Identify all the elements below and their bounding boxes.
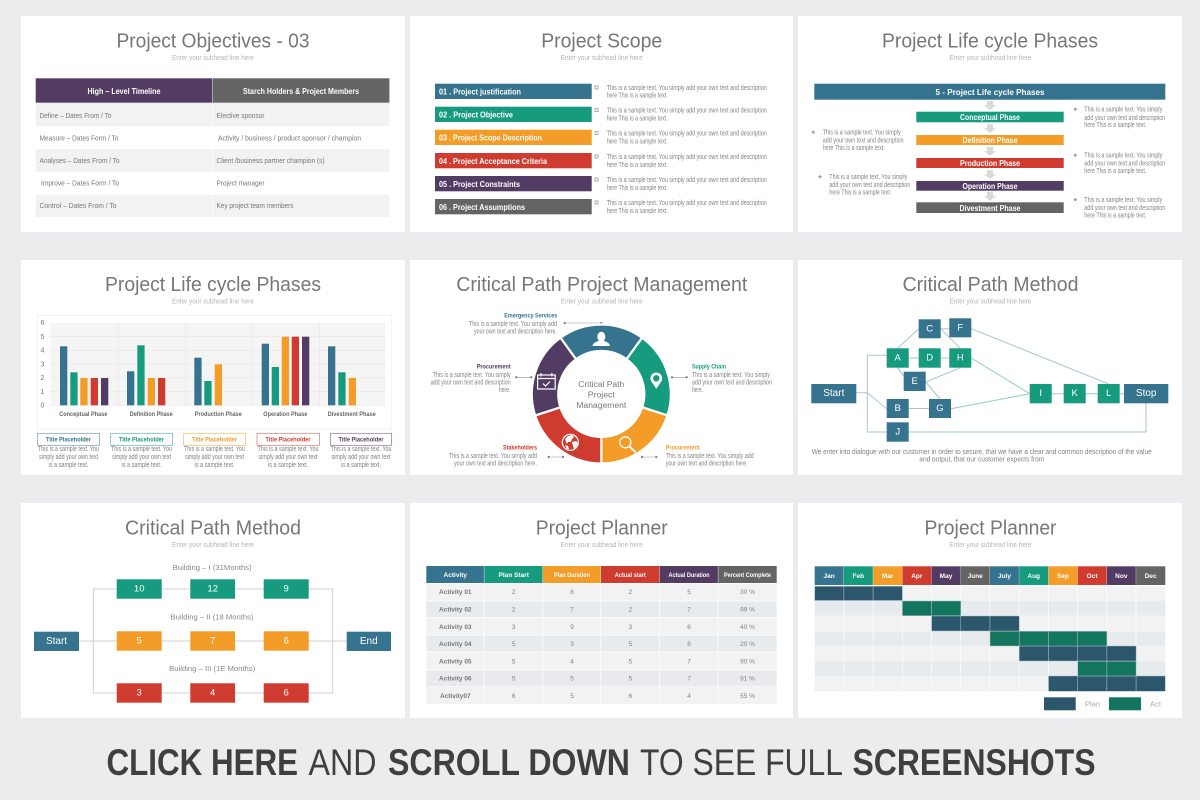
planner table: 5 <box>570 693 574 700</box>
scope item 04: 04 . Project Acceptance Criteria <box>439 157 547 166</box>
scope item 02: 02 . Project Objective <box>439 111 513 120</box>
description text: We enter into dialogue with our customer in order to secure, that we have a clear and common description of the value <box>812 447 1152 456</box>
planner table: 4 <box>687 693 691 700</box>
network nodes <box>811 318 1168 442</box>
gantt legend: Plan <box>1085 699 1100 708</box>
callout: procurement left <box>431 364 511 394</box>
gantt month header: Dec <box>1145 573 1157 580</box>
building II row: 7 <box>210 636 215 646</box>
phase stack: Operation Phase <box>962 182 1018 191</box>
gantt month header: Oct <box>1087 573 1098 580</box>
placeholder card 2: simply add your own text <box>112 454 171 461</box>
panel: life cycle bar chart <box>21 260 405 475</box>
building labels: Building – I (31Months) <box>173 563 252 572</box>
planner table: Activity 05 <box>439 658 472 665</box>
placeholder card 5: simply add your own text <box>332 454 391 461</box>
panel: project scope <box>410 16 793 232</box>
callout: procurement right <box>666 444 754 468</box>
note right 1: add your own text and description <box>1084 115 1165 122</box>
note right 2: ❖ <box>1073 153 1078 159</box>
gantt month header <box>815 566 1165 585</box>
building I row: 9 <box>284 584 289 594</box>
note right 2: add your own text and description <box>1084 161 1165 168</box>
gantt month header: May <box>940 573 953 580</box>
network nodes: F <box>957 322 963 333</box>
subhead: Enter your subhead line here <box>172 542 254 549</box>
planner table: Actual start <box>615 572 647 579</box>
callout: supply chain: here. <box>692 387 703 394</box>
planner table: 6 <box>512 693 516 700</box>
table: Define – Dates From / To <box>40 111 112 120</box>
building III row: 4 <box>210 688 215 698</box>
bar chart: 3 <box>41 361 45 368</box>
subhead: Enter your subhead line here <box>950 542 1032 549</box>
planner table: 4 <box>570 658 574 665</box>
planner table: 2 <box>628 606 632 613</box>
note left 1: here This is a sample text. <box>823 145 885 152</box>
bar chart: Conceptual Phase <box>59 411 108 418</box>
planner table: 7 <box>687 606 691 613</box>
bar chart: 4 <box>41 348 45 355</box>
footer call to action: SCREENSHOTS <box>852 742 1096 783</box>
start node <box>34 632 79 651</box>
planner table: 7 <box>687 675 691 682</box>
network nodes: K <box>1072 388 1079 399</box>
scope item 03: This is a sample text. You simply add your own text and description <box>607 131 767 138</box>
phase stack: Conceptual Phase <box>960 113 1020 122</box>
table: Measure – Dates Form / To <box>40 134 118 143</box>
panel: project planner gantt <box>798 503 1182 718</box>
path connectors <box>79 589 347 693</box>
heading: critical path method: Critical Path Method <box>125 516 301 539</box>
heading: project planner: Project Planner <box>924 516 1057 539</box>
planner table: Plan Start <box>499 572 530 579</box>
note right 1: This is a sample text. You simply <box>1084 107 1163 114</box>
building I row: 12 <box>207 584 218 594</box>
building III row: 3 <box>137 688 142 698</box>
start node: Start <box>46 636 67 647</box>
footer call to action: TO SEE FULL <box>640 742 843 783</box>
placeholder card 3: Title Placeholder <box>192 436 237 443</box>
placeholder card 3: simply add your own text <box>185 454 244 461</box>
building II row <box>117 631 309 651</box>
scope item 02: here This is a sample text. <box>607 116 668 123</box>
table: Activity / business / product sponsor / champion <box>218 134 361 143</box>
building labels: Building – III (1E Months) <box>169 664 256 673</box>
heading: critical path project management: Critical Path Project Management <box>456 273 748 296</box>
subhead: Enter your subhead line here <box>561 55 643 62</box>
note left 1: add your own text and description <box>823 138 904 145</box>
note right 1 <box>1073 106 1165 129</box>
planner table: 20 % <box>740 641 755 648</box>
note left 1 <box>811 130 904 152</box>
callout: supply chain: Supply Chain <box>692 363 726 370</box>
building I row: 10 <box>134 584 144 594</box>
network nodes: J <box>895 426 900 438</box>
placeholder card 1: is a sample text. <box>48 462 89 469</box>
subhead: Enter your subhead line here <box>172 298 254 305</box>
building labels: Building – II (18 Months) <box>170 612 254 621</box>
callout: procurement left: This is a sample text. You simply <box>433 372 511 379</box>
bar chart: 6 <box>41 320 45 327</box>
callout: procurement right: your own text and description here. <box>666 460 748 467</box>
table: Control – Dates From / To <box>40 201 116 210</box>
table: Analyses – Dates From / To <box>40 156 120 165</box>
note right 3 <box>1073 197 1165 220</box>
description text <box>812 447 1152 464</box>
ring centre label: Management <box>576 401 627 410</box>
icon: calendar <box>538 373 555 389</box>
planner table: 91 % <box>740 675 755 682</box>
heading: project planner: Project Planner <box>536 516 668 539</box>
callout: procurement right: Procurement <box>666 444 700 451</box>
heading: project objectives: Project Objectives - 03 <box>116 30 310 53</box>
note right 1: ❖ <box>1073 107 1078 113</box>
planner table: Activity <box>444 572 467 579</box>
scope item 01 <box>435 84 767 100</box>
placeholder card 2: This is a sample text. You <box>111 446 172 453</box>
network nodes: E <box>912 376 918 387</box>
callout: stakeholders: This is a sample text. You simply add <box>449 453 537 460</box>
note right 2: This is a sample text. You simply <box>1084 153 1163 160</box>
arrows between phases <box>984 101 996 201</box>
scope item 06: here This is a sample text. <box>607 208 668 215</box>
note left 2: add your own text and description <box>829 182 910 189</box>
gantt legend <box>1044 697 1162 710</box>
planner table: 30 % <box>740 589 755 596</box>
network connectors <box>856 329 1146 432</box>
planner table: 5 <box>512 675 516 682</box>
label connectors <box>515 322 688 458</box>
planner table: 99 % <box>740 606 755 613</box>
building I row <box>117 579 309 599</box>
note right 2 <box>1073 152 1165 175</box>
gantt month header: Aug <box>1027 573 1040 580</box>
scope item 01: 01 . Project justification <box>439 88 521 97</box>
footer call to action <box>106 742 1096 783</box>
scope item 01: here This is a sample text. <box>607 93 668 100</box>
planner table: Activity 04 <box>439 641 472 648</box>
table: Key project team members <box>216 201 294 210</box>
planner table: 2 <box>512 589 516 596</box>
footer call to action: CLICK HERE <box>106 742 298 783</box>
placeholder card 3: This is a sample text. You <box>184 446 245 453</box>
subhead: Enter your subhead line here <box>172 55 254 62</box>
scope item 04: This is a sample text. You simply add your own text and description <box>607 154 767 161</box>
placeholder card 5 <box>330 433 392 469</box>
placeholder card 2: is a sample text. <box>122 462 162 469</box>
gantt month header: June <box>968 573 983 580</box>
planner table: 3 <box>512 624 516 631</box>
icon: globe <box>562 434 578 450</box>
planner table: 3 <box>628 624 632 631</box>
callout: supply chain: This is a sample text. You simply <box>692 372 770 379</box>
ring centre label: Project <box>588 390 616 399</box>
table: Starch Holders & Project Members <box>243 87 359 96</box>
scope item 04 <box>435 153 767 169</box>
bar chart: 0 <box>41 402 45 409</box>
gantt month header: Sep <box>1057 573 1069 580</box>
bar chart: Production Phase <box>195 411 242 418</box>
panel: project life cycle flow <box>798 16 1182 232</box>
planner table: 5 <box>512 658 516 665</box>
planner table: Percent Complete <box>724 572 771 579</box>
panel: project objectives table <box>21 16 405 232</box>
scope item 06: This is a sample text. You simply add your own text and description <box>607 200 767 207</box>
planner table: 5 <box>512 641 516 648</box>
planner table: 6 <box>570 589 574 596</box>
subhead: Enter your subhead line here <box>950 298 1032 305</box>
bar chart: Definition Phase <box>130 411 173 418</box>
gantt month header: Apr <box>911 573 923 580</box>
placeholder card 5: is a sample text. <box>341 462 381 469</box>
phase stack: Divestment Phase <box>960 204 1021 213</box>
table: Elective sponsor <box>216 111 265 120</box>
callout: supply chain: add your own text and description <box>692 379 772 386</box>
scope item 05: here This is a sample text. <box>607 185 668 192</box>
scope item 05: This is a sample text. You simply add your own text and description <box>607 177 767 184</box>
planner table: Activity 06 <box>439 675 472 682</box>
scope item 06: 06 . Project Assumptions <box>439 203 525 212</box>
description text: and output, that our customer expects from <box>919 454 1044 463</box>
note left 2 <box>818 174 910 196</box>
placeholder card 4: is a sample text. <box>268 462 308 469</box>
table: Improve – Dates Form / To <box>41 179 119 188</box>
network nodes: D <box>926 352 933 364</box>
icon: magnifier <box>620 437 636 452</box>
note left 2: This is a sample text. You simply <box>829 174 908 181</box>
network nodes: B <box>895 403 901 414</box>
network nodes: Stop <box>1136 388 1157 399</box>
callout: stakeholders: Stakeholders <box>503 444 537 451</box>
subhead: Enter your subhead line here <box>561 298 643 305</box>
scope item 04: here This is a sample text. <box>607 162 668 169</box>
scope item 02 <box>435 107 767 122</box>
placeholder card 1: Title Placeholder <box>46 436 91 443</box>
planner table: Activity 03 <box>439 624 472 631</box>
callout: emergency services: Emergency Services <box>504 312 558 319</box>
planner table: Activity 02 <box>439 606 472 613</box>
planner table: Activity 01 <box>439 589 472 596</box>
placeholder card 1 <box>38 433 100 469</box>
phase stack: Production Phase <box>960 159 1020 168</box>
note right 3: here This is a sample text. <box>1084 213 1146 220</box>
table: High – Level Timeline <box>88 87 161 96</box>
top banner: 5 - Project Life cycle Phases <box>936 88 1045 97</box>
bar chart: Operation Phase <box>263 411 308 418</box>
gantt month header: July <box>998 573 1011 580</box>
network nodes: Start <box>823 388 845 399</box>
building III row: 6 <box>284 688 289 698</box>
network nodes: G <box>936 403 944 414</box>
placeholder card 4 <box>257 433 319 469</box>
ring centre label: Critical Path <box>578 380 624 389</box>
planner table: 6 <box>628 693 632 700</box>
note left 2: here This is a sample text. <box>829 190 891 197</box>
panel: critical path project management ring <box>410 260 793 475</box>
callout: procurement left: here. <box>499 387 511 394</box>
gantt bars <box>815 586 1165 691</box>
bar chart: 5 <box>41 334 45 341</box>
end node: End <box>360 636 378 647</box>
scope item 06 <box>435 199 767 215</box>
placeholder card 4: This is a sample text. You <box>258 446 319 453</box>
ring centre label <box>576 380 627 410</box>
panel: project planner table <box>410 503 793 718</box>
planner table: Plan Duration <box>554 572 590 579</box>
building labels <box>169 563 256 673</box>
heading: critical path method: Critical Path Method <box>902 273 1078 296</box>
icon: location pin <box>650 372 662 389</box>
bar chart <box>37 315 392 429</box>
scope item 03 <box>435 130 767 146</box>
callout: supply chain <box>692 364 772 394</box>
scope item 03: 03 . Project Scope Description <box>439 134 542 143</box>
building II row: 5 <box>137 636 142 646</box>
planner table: 7 <box>570 606 574 613</box>
placeholder card 3 <box>184 433 246 469</box>
network nodes: C <box>926 323 933 334</box>
gantt month header: Jan <box>823 573 835 580</box>
planner table: 3 <box>570 641 574 648</box>
placeholder card 5: Title Placeholder <box>338 436 384 443</box>
callout: stakeholders: your own text and description here. <box>454 460 537 467</box>
bar chart: Divestment Phase <box>328 411 376 418</box>
planner table: 9 <box>570 624 574 631</box>
planner table: 6 <box>687 624 691 631</box>
scope item 03: here This is a sample text. <box>607 139 668 146</box>
planner table <box>426 566 777 704</box>
note left 1: ❖ <box>811 130 816 136</box>
callout: emergency services: your own text and description here. <box>474 328 557 335</box>
building III row <box>117 683 309 703</box>
phase stack: Definition Phase <box>962 136 1018 145</box>
gantt month header: Feb <box>853 573 864 580</box>
note right 3: add your own text and description <box>1084 205 1165 212</box>
bar chart: 2 <box>41 375 45 382</box>
callout: procurement left: add your own text and description <box>431 379 511 386</box>
planner table: Activity07 <box>440 693 471 700</box>
placeholder card 4: simply add your own text <box>258 454 318 461</box>
planner table: 5 <box>628 641 632 648</box>
scope item 05: 05 . Project Constraints <box>439 180 520 189</box>
gantt legend: Act <box>1150 699 1162 708</box>
note right 3: This is a sample text. You simply <box>1084 197 1163 204</box>
footer call to action: SCROLL DOWN <box>388 742 630 783</box>
planner table: 2 <box>512 606 516 613</box>
planner table: 90 % <box>740 658 755 665</box>
scope item 01: This is a sample text. You simply add your own text and description <box>607 85 767 92</box>
placeholder card 1: This is a sample text. You <box>38 446 99 453</box>
gantt month header: Mar <box>882 573 894 580</box>
callout: procurement left: Procurement <box>477 363 511 370</box>
note right 1: here This is a sample text. <box>1084 122 1146 129</box>
footer call to action: AND <box>308 742 376 783</box>
note left 2: ❖ <box>818 175 823 181</box>
planner table: Actual Duration <box>668 572 710 579</box>
planner table: 5 <box>628 675 632 682</box>
table: Client /business partner champion (s) <box>216 156 325 165</box>
building II row: 6 <box>284 636 289 646</box>
planner table: 2 <box>628 589 632 596</box>
panel: critical path method network <box>798 260 1182 475</box>
network nodes: H <box>957 352 964 364</box>
scope item 05 <box>435 176 767 192</box>
callout: stakeholders <box>449 444 537 468</box>
planner table: 5 <box>687 589 691 596</box>
table <box>36 78 389 217</box>
heading: project scope: Project Scope <box>541 30 662 53</box>
phase stack <box>916 112 1064 213</box>
note right 2: here This is a sample text. <box>1084 168 1146 175</box>
gantt grid <box>815 586 1165 691</box>
note left 1: This is a sample text. You simply <box>823 130 901 137</box>
callout: procurement right: This is a sample text. You simply add <box>666 453 754 460</box>
planner table: 6 <box>687 641 691 648</box>
placeholder card 2 <box>111 433 173 469</box>
end node <box>347 632 391 651</box>
scope item 02: This is a sample text. You simply add your own text and description <box>607 108 767 115</box>
bar chart: 1 <box>41 389 45 396</box>
placeholder card 1: simply add your own text <box>39 454 98 461</box>
network nodes: I <box>1039 388 1042 399</box>
subhead: Enter your subhead line here <box>950 55 1032 62</box>
planner table: 5 <box>570 675 574 682</box>
ring diagram <box>532 324 671 464</box>
callout: emergency services <box>469 312 558 336</box>
table: Project manager <box>216 179 265 188</box>
heading: life cycle phases: Project Life cycle Phases <box>882 30 1098 53</box>
placeholder card 2: Title Placeholder <box>119 436 164 443</box>
placeholder card 4: Title Placeholder <box>266 436 311 443</box>
planner table: 5 <box>628 658 632 665</box>
heading: life cycle phases: Project Life cycle Phases <box>105 273 321 296</box>
gantt month header: Nov <box>1115 573 1128 580</box>
note right 3: ❖ <box>1073 197 1078 203</box>
placeholder card 3: is a sample text. <box>194 462 235 469</box>
top banner <box>814 84 1165 100</box>
panel: critical path method buildings <box>21 503 405 718</box>
planner table: 55 % <box>740 693 755 700</box>
planner table: 40 % <box>740 624 755 631</box>
network nodes: L <box>1106 388 1111 399</box>
icon: person <box>592 332 610 346</box>
planner table: 7 <box>687 658 691 665</box>
callout: emergency services: This is a sample text. You simply add <box>469 321 557 328</box>
subhead: Enter your subhead line here <box>561 542 643 549</box>
placeholder card 5: This is a sample text. You <box>330 446 392 453</box>
network nodes: A <box>895 352 902 364</box>
